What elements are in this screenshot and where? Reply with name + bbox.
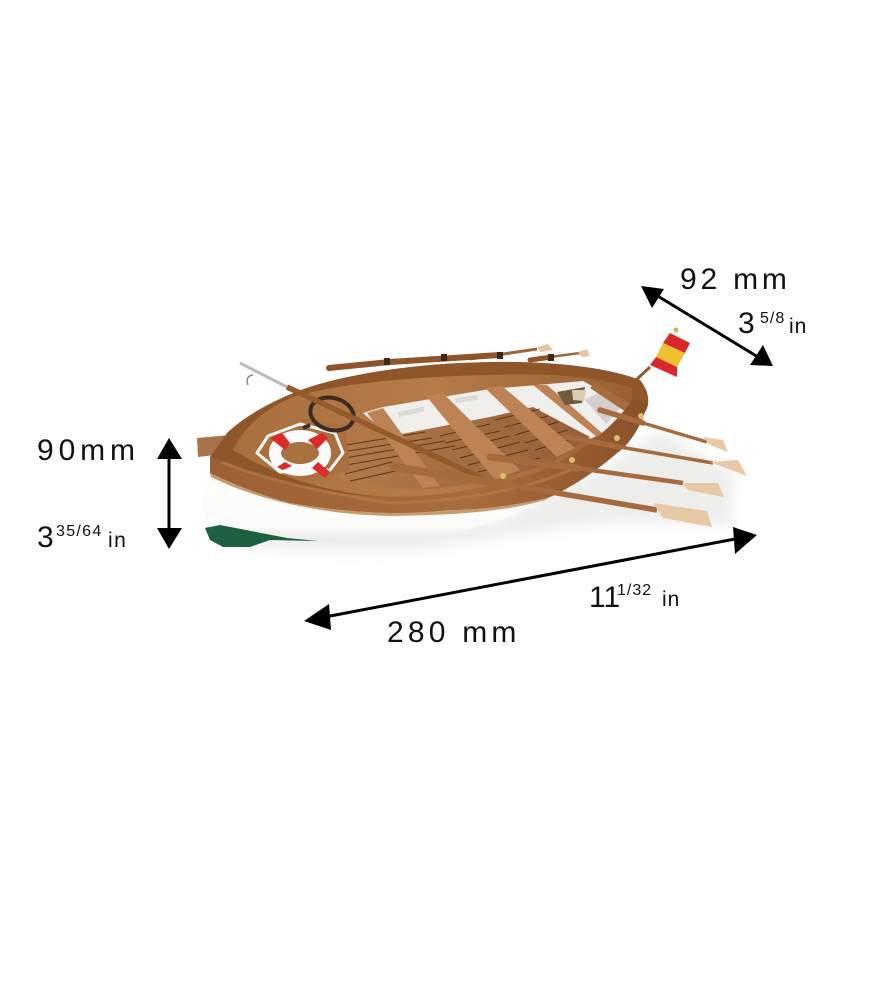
front rim (210, 400, 647, 513)
label: height: 90mm (37, 434, 140, 467)
stem post (197, 435, 233, 457)
label: length: in (662, 588, 680, 611)
front rim underside (210, 473, 550, 516)
arrow: height (157, 438, 182, 549)
boat rim (210, 362, 648, 513)
label: length: 11 (589, 581, 620, 614)
label: width: 3 (738, 307, 755, 340)
thwarts (367, 385, 602, 488)
boat model photo illustration (197, 328, 747, 552)
stern fittings (557, 383, 632, 412)
front rim highlight (222, 462, 570, 503)
ground shadow (215, 430, 735, 552)
label: height (37, 434, 140, 554)
spanish flag (636, 328, 690, 380)
label: height: in (108, 529, 127, 552)
stern interior panel (585, 392, 620, 424)
label: height: 35/64 (56, 523, 103, 540)
label: length (387, 581, 680, 649)
far side oars (329, 344, 590, 368)
label: width: 5/8 (760, 310, 785, 327)
boat hook (240, 363, 490, 482)
label: length: 1/32 (617, 582, 652, 599)
label: height: 3 (37, 521, 54, 554)
arrow: length (304, 527, 757, 630)
life ring (257, 424, 343, 478)
coiled rope (303, 393, 357, 435)
label: width: 92 mm (680, 263, 791, 296)
arrow: width (641, 286, 773, 366)
label: length: 280 mm (387, 616, 521, 649)
deck floor planks (333, 407, 590, 490)
label: width (680, 263, 807, 340)
front oars (393, 410, 747, 527)
bow seat (250, 418, 350, 482)
hull keel green (205, 525, 318, 547)
hull white (198, 457, 560, 542)
label: width: in (789, 315, 807, 338)
white interior frames (398, 395, 477, 417)
interior white side (363, 381, 630, 448)
inner band (233, 374, 632, 497)
